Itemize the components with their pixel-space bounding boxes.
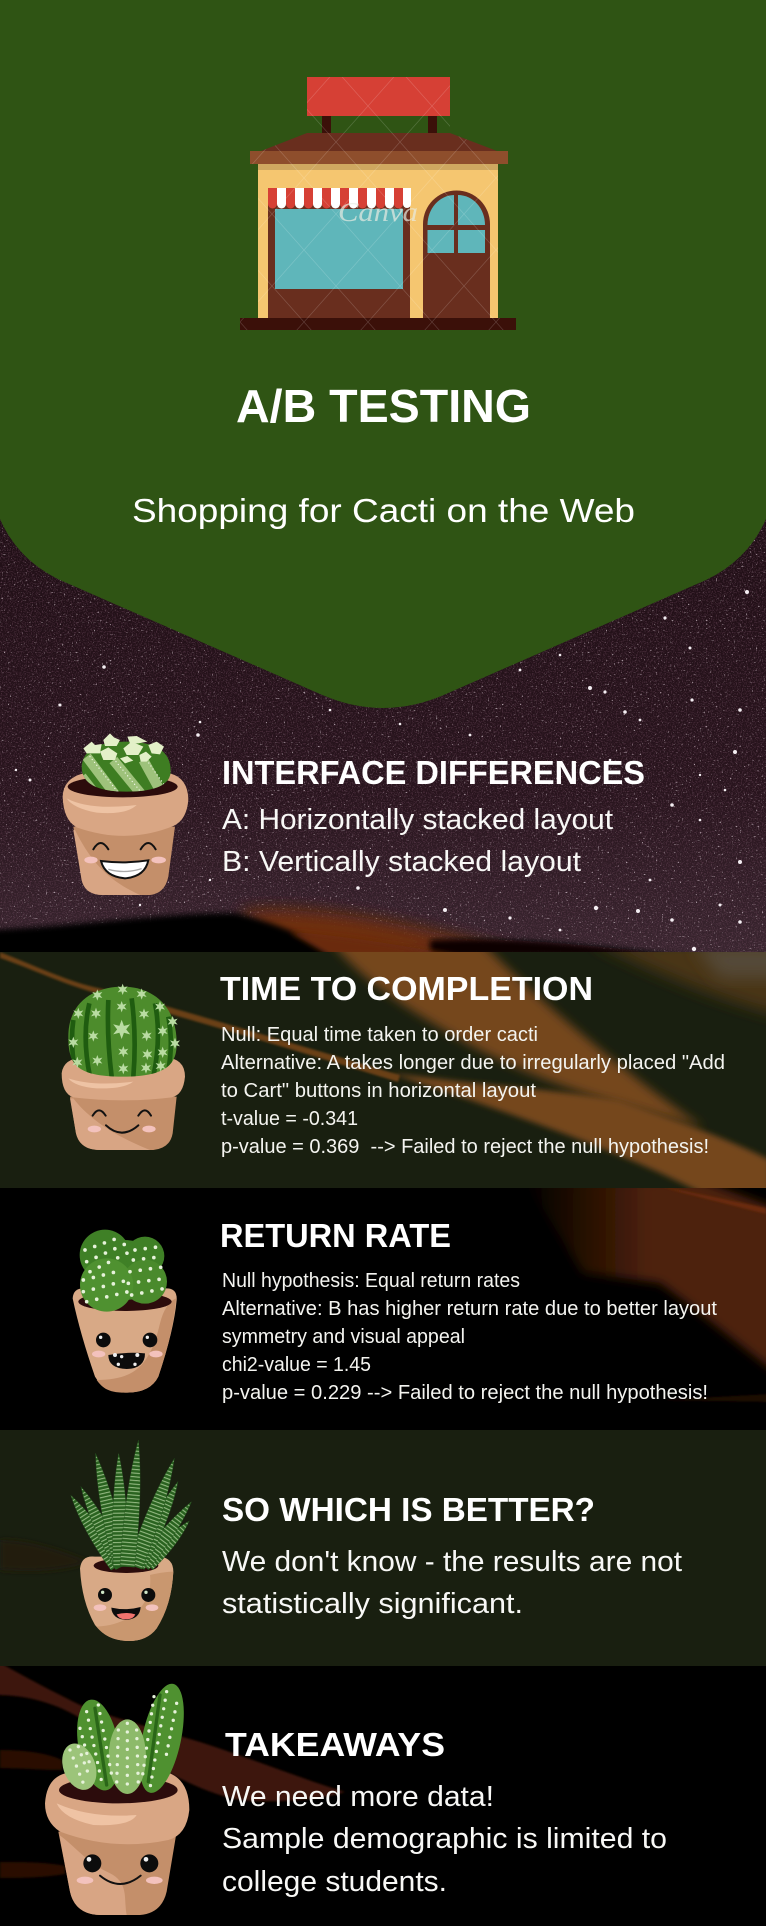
text block: p-value = 0.369 --> Failed to reject the null hypothesis! xyxy=(221,1136,709,1158)
text block: B: Vertically stacked layout xyxy=(222,846,581,878)
heading: TAKEAWAYS xyxy=(225,1726,445,1763)
heading: INTERFACE DIFFERENCES xyxy=(222,754,645,791)
text block: to Cart" buttons in horizontal layout xyxy=(221,1080,536,1102)
panel: takeaways xyxy=(0,1660,667,1915)
icon: three-armed cactus in smiling pot xyxy=(45,1680,192,1915)
panel: so which is better xyxy=(0,1430,766,1666)
background: dunes above the second section xyxy=(0,910,690,960)
subtitle: Shopping for Cacti on the Web xyxy=(132,492,635,529)
background streaks xyxy=(3,1544,77,1568)
text block: Alternative: A takes longer due to irregularly placed "Add xyxy=(221,1052,725,1074)
text block: chi2-value = 1.45 xyxy=(222,1354,371,1376)
background streaks xyxy=(0,935,766,1195)
icon: spiky succulent in happy pot xyxy=(65,1439,197,1641)
text block xyxy=(222,1270,717,1404)
header banner shape xyxy=(0,0,766,708)
text block: Sample demographic is limited to xyxy=(222,1823,667,1855)
icon: shop xyxy=(240,70,516,332)
text block: Null: Equal time taken to order cacti xyxy=(221,1024,538,1046)
title: A/B TESTING xyxy=(236,380,531,432)
text block: A: Horizontally stacked layout xyxy=(222,804,613,836)
panel: interface differences xyxy=(63,733,645,895)
text block: We don't know - the results are not xyxy=(222,1546,682,1578)
text block xyxy=(222,1781,667,1898)
text block: t-value = -0.341 xyxy=(221,1108,358,1130)
background streaks xyxy=(0,1660,345,1878)
text block xyxy=(221,1024,725,1158)
icon: cactus with flowers in smiling pot xyxy=(63,733,188,895)
panel: return rate xyxy=(73,1180,766,1404)
panel: time to completion xyxy=(0,935,766,1195)
background streaks xyxy=(525,1180,766,1402)
text block: Alternative: B has higher return rate due to better layout xyxy=(222,1298,717,1320)
heading: TIME TO COMPLETION xyxy=(220,970,593,1007)
heading: SO WHICH IS BETTER? xyxy=(222,1491,595,1528)
text block: p-value = 0.229 --> Failed to reject the null hypothesis! xyxy=(222,1382,708,1404)
text block: symmetry and visual appeal xyxy=(222,1326,465,1348)
text block: Null hypothesis: Equal return rates xyxy=(222,1270,520,1292)
icon: round cactus in smiling pot xyxy=(62,984,185,1150)
icon: shop: Canva xyxy=(338,197,418,227)
text block: We need more data! xyxy=(222,1781,494,1813)
text block: statistically significant. xyxy=(222,1588,523,1620)
text block xyxy=(222,804,613,878)
heading: RETURN RATE xyxy=(220,1217,451,1254)
text block: college students. xyxy=(222,1866,447,1898)
icon: clustered cactus in grinning pot xyxy=(73,1230,177,1393)
text block xyxy=(222,1546,682,1620)
